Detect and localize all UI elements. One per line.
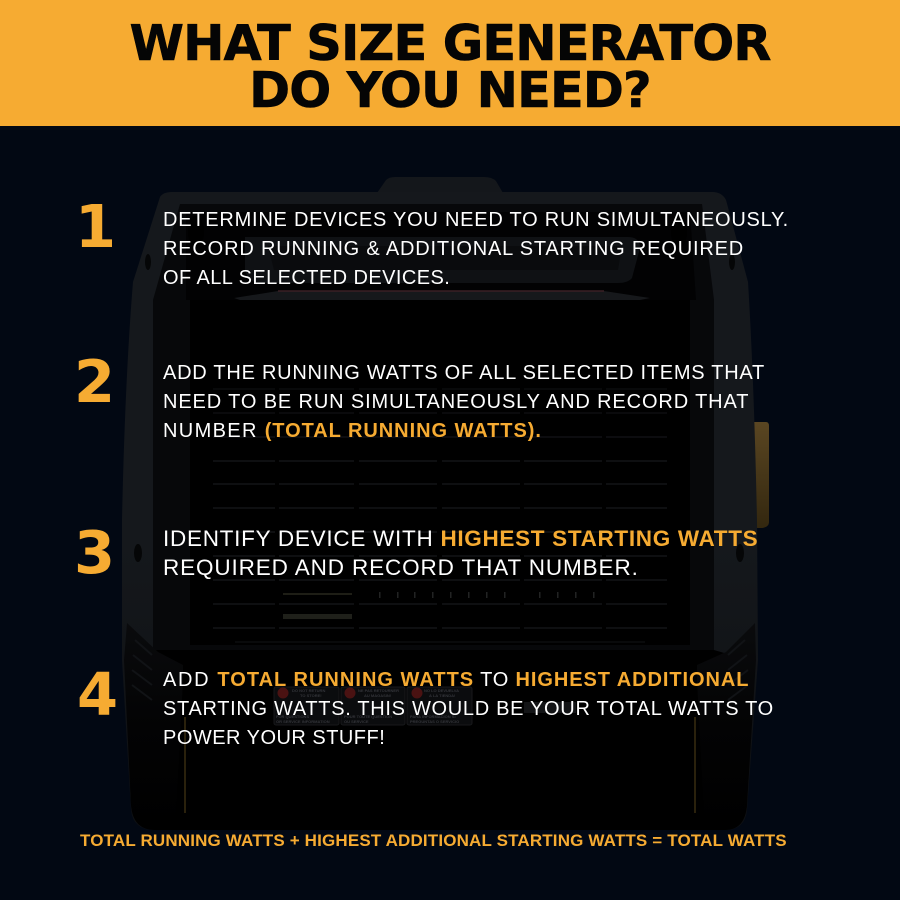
step 1 text (163, 208, 789, 289)
carry handle (377, 177, 503, 193)
title: DO YOU NEED? (249, 61, 651, 119)
step 2 text: NUMBER (TOTAL RUNNING WATTS). (163, 420, 542, 442)
step 4 text (163, 668, 774, 749)
lower black base (125, 650, 748, 830)
warning stickers: DO NOT RETURN (292, 688, 325, 693)
step 1 text: DETERMINE DEVICES YOU NEED TO RUN SIMULTANEOUSLY. (163, 208, 789, 230)
warning stickers: NO LO DEVUELVA (424, 688, 459, 693)
warning stickers: TO STORE! (300, 693, 322, 698)
side knob (752, 422, 769, 528)
title: WHAT SIZE GENERATOR (129, 14, 771, 72)
warning stickers: FOR QUESTIONS (276, 714, 309, 719)
handle recess (186, 212, 696, 300)
warning stickers: OU SERVICE (344, 719, 369, 724)
header banner (0, 0, 900, 126)
warning stickers: POUR TOUTE QUESTION (344, 714, 392, 719)
step 3 text: IDENTIFY DEVICE WITH HIGHEST STARTING WATTS (163, 526, 758, 551)
warning stickers: NE PAS RETOURNER (358, 688, 399, 693)
step 3 text: REQUIRED AND RECORD THAT NUMBER. (163, 555, 639, 580)
left wheel (124, 623, 185, 828)
step 3 text (163, 526, 758, 580)
step 4 text: STARTING WATTS. THIS WOULD BE YOUR TOTAL WATTS TO (163, 698, 774, 720)
body shell (122, 192, 758, 830)
step 4 text: ADD TOTAL RUNNING WATTS TO HIGHEST ADDITIONAL (163, 668, 749, 690)
step 1 number: 1 (75, 192, 116, 261)
vent lines (213, 385, 667, 642)
step 2 text: NEED TO BE RUN SIMULTANEOUSLY AND RECORD THAT (163, 391, 749, 413)
step 3 number: 3 (74, 518, 115, 587)
step 1 text: OF ALL SELECTED DEVICES. (163, 267, 450, 289)
inner panel (153, 204, 714, 650)
title (129, 14, 771, 119)
step 2 number: 2 (74, 347, 115, 416)
right wheel (695, 623, 756, 828)
warning stickers: OR SERVICE INFORMATION (276, 719, 330, 724)
warning stickers: AU MAGASIN! (364, 693, 391, 698)
step 1 text: RECORD RUNNING & ADDITIONAL STARTING REQUIRED (163, 238, 744, 260)
centre black (190, 300, 690, 645)
warning stickers (274, 687, 576, 725)
warning stickers: PARA INFORMACION SI (410, 714, 456, 719)
step 2 text: ADD THE RUNNING WATTS OF ALL SELECTED ITEMS THAT (163, 362, 765, 384)
warning stickers: PREGUNTAS O SERVICIO (410, 719, 459, 724)
step 2 text (163, 362, 765, 442)
warning stickers: A LA TIENDA! (429, 693, 455, 698)
formula footer: TOTAL RUNNING WATTS + HIGHEST ADDITIONAL STARTING WATTS = TOTAL WATTS (80, 831, 787, 850)
step 4 number: 4 (77, 660, 118, 729)
step 4 text: POWER YOUR STUFF! (163, 727, 385, 749)
mounting holes (134, 254, 744, 562)
